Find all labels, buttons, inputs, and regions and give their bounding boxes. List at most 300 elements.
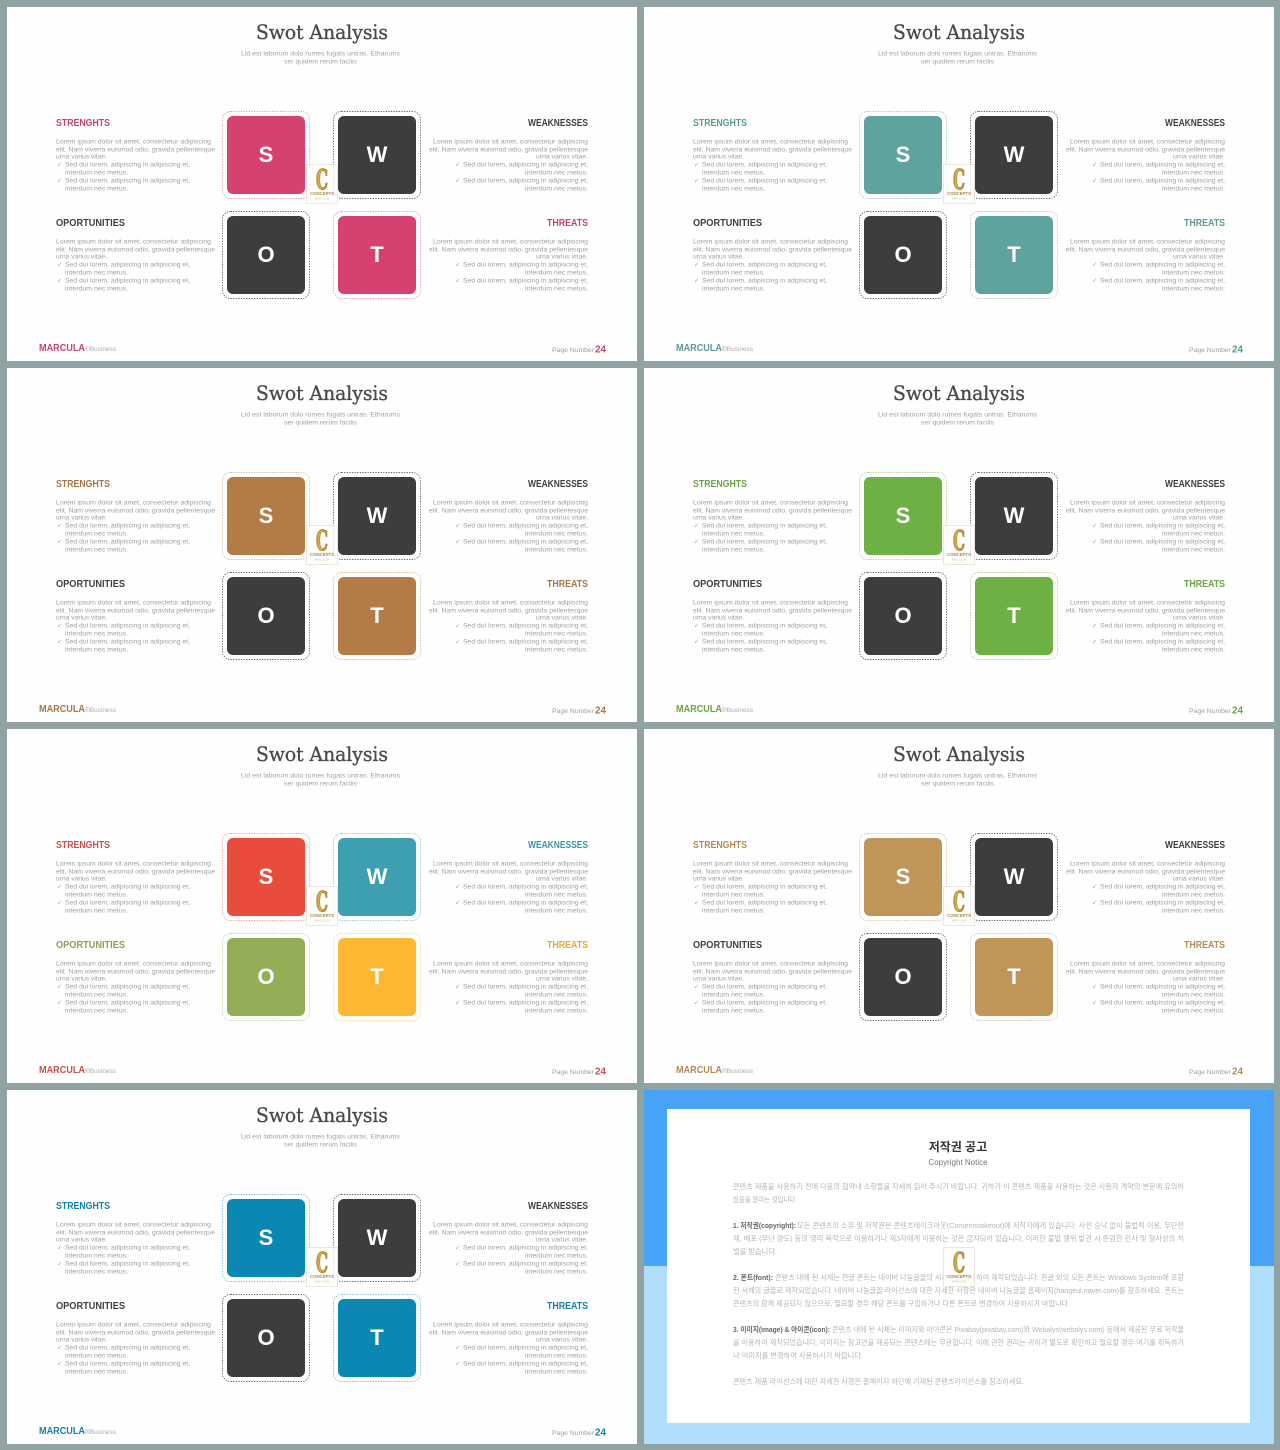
text block: weaknesses: ✓ (1092, 178, 1097, 184)
text block: strengths: Sed dui lorem, adipiscing in adipiscing et, (702, 522, 827, 530)
text block: strengths: urna varius vitae. (693, 154, 744, 160)
text block: strengths: Lorem ipsum dolor sit amet, consectetur adipiscing (693, 860, 848, 868)
notice section: copyright: 모든 콘텐츠의 소유 및 저작권은 콘텐츠테이크아웃(Contentstakeout)에 저작자에게 있습니다. 사전 승낙 없이 불법적 이용, 무단전 (797, 1220, 1184, 1230)
text block: opportunities: Lorem ipsum dolor sit amet, consectetur adipiscing (693, 600, 848, 606)
icon: gold C watermark: MAIL.COM (952, 558, 966, 562)
footer brand: MARCULA (676, 343, 722, 354)
text block: weaknesses: WEAKNESSES (528, 840, 588, 851)
text block: threats (429, 218, 588, 292)
title: Swot Analysis (256, 381, 388, 405)
text block: opportunities (56, 218, 215, 292)
tile: S (222, 112, 310, 198)
text block: threats: THREATS (1184, 218, 1225, 229)
text block: weaknesses: ✓ (455, 538, 460, 546)
page number: Page Number (552, 347, 594, 354)
text block: weaknesses: Lorem ipsum dolor sit amet, consectetur adipiscing (433, 138, 588, 146)
text block: weaknesses: Sed dui lorem, adipiscing in adipiscing et, (463, 178, 588, 184)
footer brand (676, 343, 753, 354)
text block: opportunities: OPORTUNITIES (693, 940, 762, 951)
text block: weaknesses: Sed dui lorem, adipiscing in adipiscing et, (1100, 884, 1225, 890)
icon: gold C watermark: C (316, 526, 328, 557)
text block: threats: urna varius vitae. (536, 1336, 588, 1344)
tile: T (334, 212, 420, 298)
text block: opportunities: ✓ (694, 278, 699, 284)
text block: opportunities: ✓ (694, 1000, 699, 1006)
text block: opportunities: ✓ (694, 984, 699, 990)
text block: threats: urna varius vitae. (536, 976, 588, 982)
text block: threats: interdum nec metus. (525, 1352, 588, 1360)
page number: 24 (595, 706, 606, 716)
text block: strengths: Sed dui lorem, adipiscing in adipiscing et, (65, 1260, 190, 1268)
text block: strengths: ✓ (57, 538, 62, 546)
page number: 24 (1232, 344, 1243, 356)
text block: opportunities: ✓ (57, 984, 62, 990)
text block: strengths: Sed dui lorem, adipiscing in adipiscing et, (65, 178, 190, 184)
text block: opportunities: OPORTUNITIES (693, 579, 762, 590)
footer brand: MARCULA (676, 704, 722, 715)
footer brand: ®Business (85, 1429, 116, 1436)
text block: opportunities: ✓ (57, 622, 62, 630)
page number (1189, 1066, 1243, 1078)
icon: gold C watermark: CONCEPTS (947, 1274, 971, 1279)
text block: opportunities: interdum nec metus. (702, 630, 765, 638)
text block: strengths: elit. Nam viverra euismod odio, gravida pellentesque (693, 508, 852, 514)
subtitle (878, 772, 1038, 788)
text block: strengths (693, 118, 852, 192)
text block: weaknesses: interdum nec metus. (1162, 530, 1225, 538)
text block: strengths: Lorem ipsum dolor sit amet, consectetur adipiscing (56, 138, 211, 146)
text block: strengths (693, 840, 852, 914)
page number: Page Number (552, 1430, 594, 1437)
text block: threats: elit. Nam viverra euismod odio, gravida pellentesque (1066, 246, 1225, 254)
text block: opportunities: Sed dui lorem, adipiscing in adipiscing et, (65, 622, 190, 630)
tile: O (860, 212, 946, 298)
text block: opportunities: OPORTUNITIES (693, 218, 762, 229)
subtitle: Lid est laborum dolo rumes fugats untras. Etharums (878, 412, 1038, 418)
text block: opportunities (693, 940, 852, 1014)
footer brand (676, 1065, 753, 1076)
subtitle: Lid est laborum dolo rumes fugats untras. Etharums (241, 412, 401, 418)
text block: opportunities: interdum nec metus. (65, 1352, 128, 1360)
text block: strengths: interdum nec metus. (702, 186, 765, 192)
footer brand: MARCULA (676, 1065, 722, 1076)
text block: strengths: Sed dui lorem, adipiscing in adipiscing et, (65, 1244, 190, 1252)
text block: threats: Lorem ipsum dolor sit amet, consectetur adipiscing (1070, 238, 1225, 246)
panel: SWOT slide, brown (7, 368, 637, 722)
text block: weaknesses: elit. Nam viverra euismod odio, gravida pellentesque (429, 868, 588, 876)
tile: W (334, 834, 420, 920)
title: Swot Analysis (893, 742, 1025, 766)
icon: gold C watermark: C (953, 165, 965, 196)
footer brand (39, 1426, 116, 1437)
text block: strengths: Sed dui lorem, adipiscing in adipiscing et, (65, 162, 190, 168)
footer brand (39, 343, 116, 354)
text block: strengths: ✓ (57, 884, 62, 890)
text block: weaknesses: elit. Nam viverra euismod odio, gravida pellentesque (429, 146, 588, 154)
text block: opportunities (693, 218, 852, 292)
text block: strengths: Sed dui lorem, adipiscing in adipiscing et, (65, 900, 190, 906)
text block: opportunities: interdum nec metus. (702, 1008, 765, 1014)
text block: opportunities: interdum nec metus. (65, 646, 128, 654)
text block: strengths: Lorem ipsum dolor sit amet, consectetur adipiscing (693, 138, 848, 146)
notice section: copyright: 벌을 받습니다. (733, 1246, 777, 1256)
tile: O (222, 1294, 310, 1382)
icon: gold C watermark: MAIL.COM (315, 920, 329, 922)
text block: strengths: elit. Nam viverra euismod odio, gravida pellentesque (693, 146, 852, 154)
title: Swot Analysis (893, 381, 1025, 405)
text block: threats: THREATS (547, 579, 588, 590)
text block: threats: Sed dui lorem, adipiscing in adipiscing et, (1100, 638, 1225, 646)
tile: W (334, 112, 420, 198)
text block: weaknesses: ✓ (455, 522, 460, 530)
text block: weaknesses: Sed dui lorem, adipiscing in adipiscing et, (463, 522, 588, 530)
icon: gold C watermark: CONCEPTS (310, 552, 334, 557)
text block: opportunities: OPORTUNITIES (56, 1301, 125, 1312)
text block: strengths: interdum nec metus. (65, 1268, 128, 1276)
subtitle: ser quidem rerum facilis (284, 780, 358, 788)
text block: threats: ✓ (1092, 1000, 1097, 1006)
text block: threats: interdum nec metus. (525, 646, 588, 654)
text block: opportunities: urna varius vitae. (693, 976, 744, 982)
text block: weaknesses: interdum nec metus. (525, 170, 588, 176)
subtitle: ser quidem rerum facilis (921, 780, 995, 788)
text block: opportunities: interdum nec metus. (65, 630, 128, 638)
text block: threats: ✓ (455, 262, 460, 268)
icon: gold C watermark: CONCEPTS (310, 913, 334, 918)
text block: weaknesses: Sed dui lorem, adipiscing in adipiscing et, (463, 900, 588, 906)
text block: opportunities: interdum nec metus. (702, 286, 765, 292)
page number: 24 (595, 1066, 606, 1078)
notice closing line: 콘텐츠 제품 라이선스에 대한 자세한 사항은 홈페이지 하단에 기재된 콘텐츠라이선스를 참조하세요. (733, 1376, 1024, 1386)
panel: SWOT slide, teal (644, 7, 1274, 361)
text block: weaknesses: interdum nec metus. (525, 892, 588, 898)
text block: opportunities: Sed dui lorem, adipiscing in adipiscing et, (702, 262, 827, 268)
text block: weaknesses (1066, 118, 1225, 192)
subtitle: ser quidem rerum facilis (284, 420, 358, 426)
text block: strengths: interdum nec metus. (702, 170, 765, 176)
text block: weaknesses: interdum nec metus. (525, 186, 588, 192)
tile: T: T (370, 603, 384, 628)
tile: O (222, 934, 310, 1020)
page number (552, 706, 606, 716)
text block: weaknesses: interdum nec metus. (525, 908, 588, 914)
tile: S (222, 834, 310, 920)
panel: copyright notice (644, 1090, 1274, 1444)
tile: T (334, 934, 420, 1020)
text block: weaknesses: ✓ (1092, 538, 1097, 546)
subtitle (241, 50, 401, 66)
text block: threats: interdum nec metus. (1162, 646, 1225, 654)
subtitle: Lid est laborum dolo rumes fugats untras. Etharums (878, 50, 1038, 58)
text block: weaknesses: urna varius vitae. (536, 514, 588, 522)
icon: gold C watermark (944, 526, 974, 564)
text block: threats: ✓ (455, 622, 460, 630)
text block: strengths: elit. Nam viverra euismod odio, gravida pellentesque (693, 868, 852, 876)
text block: threats: ✓ (455, 278, 460, 284)
title: Swot Analysis (256, 1103, 388, 1127)
footer brand: MARCULA (39, 1426, 85, 1437)
tile: S (860, 834, 946, 920)
tile: W: W (1004, 864, 1025, 889)
notice section: images: 을 이용하여 제작되었습니다. 이미지는 참고만을 제공되는 콘텐츠에는 무관합니다. 이에 관한 권리는 귀하가 별도로 확인하고 필요할 경우 여기를 취득하거 (733, 1337, 1184, 1347)
text block: opportunities: interdum nec metus. (702, 270, 765, 276)
icon: gold C watermark (306, 886, 338, 926)
text block: opportunities: Sed dui lorem, adipiscing in adipiscing et, (702, 638, 827, 646)
text block: strengths: elit. Nam viverra euismod odio, gravida pellentesque (56, 1230, 215, 1236)
icon: gold C watermark: MAIL.COM (952, 1280, 966, 1284)
text block: weaknesses: WEAKNESSES (528, 479, 588, 490)
tile: T (970, 934, 1058, 1020)
page number (552, 344, 606, 356)
tile: O: O (894, 603, 912, 628)
tile: W: W (1004, 142, 1025, 167)
text block: threats: urna varius vitae. (1173, 614, 1225, 622)
icon: gold C watermark (944, 164, 974, 204)
text block: opportunities: elit. Nam viverra euismod odio, gravida pellentesque (56, 1330, 215, 1336)
text block: threats: ✓ (1092, 278, 1097, 284)
text block: strengths: urna varius vitae. (56, 514, 107, 522)
text block: weaknesses: Lorem ipsum dolor sit amet, consectetur adipiscing (433, 1222, 588, 1228)
text block: weaknesses: Sed dui lorem, adipiscing in adipiscing et, (1100, 162, 1225, 168)
text block: threats: interdum nec metus. (525, 270, 588, 276)
text block: opportunities: ✓ (57, 1000, 62, 1006)
notice section: copyright: 재, 배포 (무단 양도) 등의 영리 목적으로 이용하거나 제3자에게 이용하는 것은 금지되어 있습니다. 이러한 불법 행위 발견 시 준엄한 민사 및 형사상의 처 (733, 1233, 1184, 1243)
text block: threats: elit. Nam viverra euismod odio, gravida pellentesque (1066, 608, 1225, 614)
tile: W: W (367, 1225, 388, 1250)
tile: S (222, 1194, 310, 1282)
text block: threats: interdum nec metus. (1162, 630, 1225, 638)
icon: gold C watermark: MAIL.COM (952, 920, 966, 922)
text block: strengths: STRENGHTS (56, 1201, 110, 1212)
tile: O: O (257, 603, 275, 628)
text block: strengths: STRENGHTS (56, 479, 110, 490)
icon: gold C watermark: CONCEPTS (947, 191, 971, 196)
icon: gold C watermark: C (953, 1248, 965, 1279)
tile: W (334, 1194, 420, 1282)
panel: SWOT slide, blue (7, 1090, 637, 1444)
subtitle: ser quidem rerum facilis (284, 58, 358, 66)
text block: strengths: interdum nec metus. (702, 892, 765, 898)
text block: opportunities: elit. Nam viverra euismod odio, gravida pellentesque (693, 968, 852, 976)
tile: O (860, 572, 946, 660)
text block: strengths: Sed dui lorem, adipiscing in adipiscing et, (65, 884, 190, 890)
tile: S: S (259, 142, 273, 167)
text block: strengths (56, 840, 215, 914)
text block: weaknesses (1066, 840, 1225, 914)
tile: O: O (257, 964, 275, 989)
icon: gold C watermark: CONCEPTS (310, 191, 334, 196)
text block: strengths: STRENGHTS (56, 118, 110, 129)
text block: weaknesses: Lorem ipsum dolor sit amet, consectetur adipiscing (433, 860, 588, 868)
notice section: font: 된 서체의 글꼴로 제작되었습니다. 네이버 나눔글꼴 라이선스에 대한 자세한 사항은 네이버 나눔글꼴 홈페이지(hangeul.naver.com)를 참조하세요. 폰트는 (733, 1285, 1184, 1295)
text block: weaknesses: interdum nec metus. (525, 1252, 588, 1260)
footer brand: ®Business (722, 707, 753, 714)
panel: SWOT slide, crimson (7, 7, 637, 361)
text block: weaknesses: Lorem ipsum dolor sit amet, consectetur adipiscing (1070, 860, 1225, 868)
page number: Page Number (1189, 708, 1231, 715)
text block: opportunities: interdum nec metus. (65, 1368, 128, 1376)
text block: threats: ✓ (455, 984, 460, 990)
text block: opportunities: ✓ (57, 1344, 62, 1352)
text block: threats: interdum nec metus. (525, 992, 588, 998)
notice section: font: 2. 폰트(font): (733, 1273, 773, 1282)
notice intro: 콘텐츠 제품을 사용하기 전에 다음의 협약내 소항들을 자세히 읽어 주시기 바랍니다. 귀하가 이 콘텐츠 제품을 사용하는 것은 사용자 계약의 본문에 유의하 (733, 1181, 1184, 1191)
text block: weaknesses: urna varius vitae. (1173, 514, 1225, 522)
text block: opportunities: OPORTUNITIES (56, 940, 125, 951)
text block: threats: ✓ (455, 1360, 460, 1368)
text block: threats: Sed dui lorem, adipiscing in adipiscing et, (1100, 1000, 1225, 1006)
text block: weaknesses: interdum nec metus. (525, 546, 588, 554)
notice subtitle: Copyright Notice (928, 1158, 988, 1167)
text block: opportunities: ✓ (694, 622, 699, 630)
text block: weaknesses: Sed dui lorem, adipiscing in adipiscing et, (463, 538, 588, 546)
tile: O (860, 934, 946, 1020)
text block: strengths: Sed dui lorem, adipiscing in adipiscing et, (65, 522, 190, 530)
text block: weaknesses: Lorem ipsum dolor sit amet, consectetur adipiscing (1070, 500, 1225, 506)
text block: opportunities: urna varius vitae. (56, 614, 107, 622)
text block: strengths: Sed dui lorem, adipiscing in adipiscing et, (702, 884, 827, 890)
text block: weaknesses: ✓ (455, 900, 460, 906)
text block: weaknesses: Sed dui lorem, adipiscing in adipiscing et, (463, 1244, 588, 1252)
footer brand (39, 1065, 116, 1076)
text block: weaknesses: elit. Nam viverra euismod odio, gravida pellentesque (1066, 868, 1225, 876)
text block: opportunities: urna varius vitae. (56, 1336, 107, 1344)
title: Swot Analysis (256, 20, 388, 44)
tile: S: S (896, 503, 910, 528)
icon: gold C watermark: MAIL.COM (315, 1280, 329, 1284)
tile: T (334, 1294, 420, 1382)
text block: threats: Sed dui lorem, adipiscing in adipiscing et, (1100, 622, 1225, 630)
tile: S (222, 472, 310, 560)
text block: opportunities: Lorem ipsum dolor sit amet, consectetur adipiscing (56, 600, 211, 606)
text block: opportunities: interdum nec metus. (65, 992, 128, 998)
notice section: copyright: 1. 저작권(copyright): (733, 1220, 796, 1230)
text block: strengths: STRENGHTS (56, 840, 110, 851)
text block: opportunities: Lorem ipsum dolor sit amet, consectetur adipiscing (56, 238, 211, 246)
text block: opportunities: Sed dui lorem, adipiscing in adipiscing et, (65, 638, 190, 646)
notice section: images: 나 이미지를 변경하여 사용하시기 바랍니다. (733, 1350, 863, 1360)
tile: W (970, 472, 1058, 560)
text block: strengths: interdum nec metus. (702, 908, 765, 914)
text block: opportunities: interdum nec metus. (702, 992, 765, 998)
icon: gold C watermark: CONCEPTS (947, 913, 971, 918)
tile: S: S (896, 864, 910, 889)
text block: opportunities: elit. Nam viverra euismod odio, gravida pellentesque (693, 246, 852, 254)
icon: gold C watermark: C (316, 887, 328, 918)
text block: opportunities: ✓ (694, 262, 699, 268)
notice section: copyright (733, 1220, 1184, 1256)
icon: gold C watermark: CONCEPTS (947, 552, 971, 557)
icon: gold C watermark: C (953, 887, 965, 918)
text block: strengths (693, 479, 852, 554)
text block: weaknesses: Sed dui lorem, adipiscing in adipiscing et, (1100, 538, 1225, 546)
footer brand: ®Business (85, 1068, 116, 1075)
text block: threats: THREATS (1184, 579, 1225, 590)
icon: gold C watermark: C (316, 165, 328, 196)
text block: opportunities: interdum nec metus. (702, 646, 765, 654)
text block: strengths: interdum nec metus. (65, 170, 128, 176)
text block: threats (1066, 579, 1225, 654)
text block: strengths: ✓ (57, 1260, 62, 1268)
text block: strengths: Lorem ipsum dolor sit amet, consectetur adipiscing (693, 500, 848, 506)
text block: weaknesses: elit. Nam viverra euismod odio, gravida pellentesque (1066, 146, 1225, 154)
tile: S (860, 472, 946, 560)
text block: strengths: elit. Nam viverra euismod odio, gravida pellentesque (56, 868, 215, 876)
tile: T: T (1007, 964, 1021, 989)
panel: SWOT slide, green (644, 368, 1274, 722)
text block: threats: interdum nec metus. (525, 286, 588, 292)
text block: threats: Lorem ipsum dolor sit amet, consectetur adipiscing (1070, 600, 1225, 606)
notice section: images (733, 1324, 1184, 1360)
panel: SWOT slide, multicolour (7, 729, 637, 1083)
text block: weaknesses: ✓ (1092, 884, 1097, 890)
text block: opportunities: Lorem ipsum dolor sit amet, consectetur adipiscing (56, 960, 211, 968)
text block: strengths: urna varius vitae. (693, 876, 744, 882)
page number: 24 (595, 1428, 606, 1438)
text block: strengths: ✓ (57, 178, 62, 184)
tile: S: S (259, 503, 273, 528)
icon: gold C watermark (306, 164, 338, 204)
page number: Page Number (1189, 1069, 1231, 1076)
text block: strengths: interdum nec metus. (65, 892, 128, 898)
subtitle: ser quidem rerum facilis (284, 1142, 358, 1148)
text block: threats: ✓ (1092, 262, 1097, 268)
text block: threats: ✓ (455, 1000, 460, 1006)
text block: weaknesses: Sed dui lorem, adipiscing in adipiscing et, (463, 884, 588, 890)
tile: O (222, 212, 310, 298)
text block: threats: Lorem ipsum dolor sit amet, consectetur adipiscing (433, 238, 588, 246)
footer brand: MARCULA (39, 704, 85, 715)
text block: strengths: urna varius vitae. (56, 154, 107, 160)
text block: weaknesses: Sed dui lorem, adipiscing in adipiscing et, (1100, 178, 1225, 184)
text block: threats: Sed dui lorem, adipiscing in adipiscing et, (463, 1000, 588, 1006)
icon: gold C watermark: MAIL.COM (315, 198, 329, 200)
tile: S: S (896, 142, 910, 167)
text block: opportunities: OPORTUNITIES (56, 218, 125, 229)
notice intro: 셨음을 알리는 것입니다. (733, 1194, 797, 1204)
tile: W: W (367, 142, 388, 167)
text block: opportunities: Lorem ipsum dolor sit amet, consectetur adipiscing (56, 1322, 211, 1328)
text block: threats: ✓ (1092, 984, 1097, 990)
tile: O: O (257, 242, 275, 267)
text block: strengths: ✓ (57, 1244, 62, 1252)
text block: weaknesses: urna varius vitae. (536, 876, 588, 882)
page number: Page Number (1189, 347, 1231, 354)
tile: T: T (370, 1325, 384, 1350)
text block: strengths: interdum nec metus. (65, 546, 128, 554)
text block: strengths: STRENGHTS (693, 118, 747, 129)
text block: strengths: urna varius vitae. (56, 1236, 107, 1244)
text block: threats (1066, 218, 1225, 292)
text block: strengths: Sed dui lorem, adipiscing in adipiscing et, (702, 538, 827, 546)
text block: strengths: ✓ (694, 162, 699, 168)
text block: threats: interdum nec metus. (1162, 992, 1225, 998)
text block: threats: ✓ (1092, 638, 1097, 646)
title: Swot Analysis (893, 20, 1025, 44)
text block: threats: Sed dui lorem, adipiscing in adipiscing et, (463, 1360, 588, 1368)
text block: threats: interdum nec metus. (1162, 1008, 1225, 1014)
text block: threats: ✓ (455, 1344, 460, 1352)
text block: opportunities: Sed dui lorem, adipiscing in adipiscing et, (65, 984, 190, 990)
text block: weaknesses: interdum nec metus. (525, 530, 588, 538)
text block: strengths: elit. Nam viverra euismod odio, gravida pellentesque (56, 146, 215, 154)
page number: 24 (1232, 1066, 1243, 1078)
text block: threats: Lorem ipsum dolor sit amet, consectetur adipiscing (433, 960, 588, 968)
text block: strengths (56, 118, 215, 192)
text block: weaknesses: urna varius vitae. (1173, 876, 1225, 882)
text block: threats: elit. Nam viverra euismod odio, gravida pellentesque (429, 1330, 588, 1336)
text block: threats: ✓ (455, 638, 460, 646)
